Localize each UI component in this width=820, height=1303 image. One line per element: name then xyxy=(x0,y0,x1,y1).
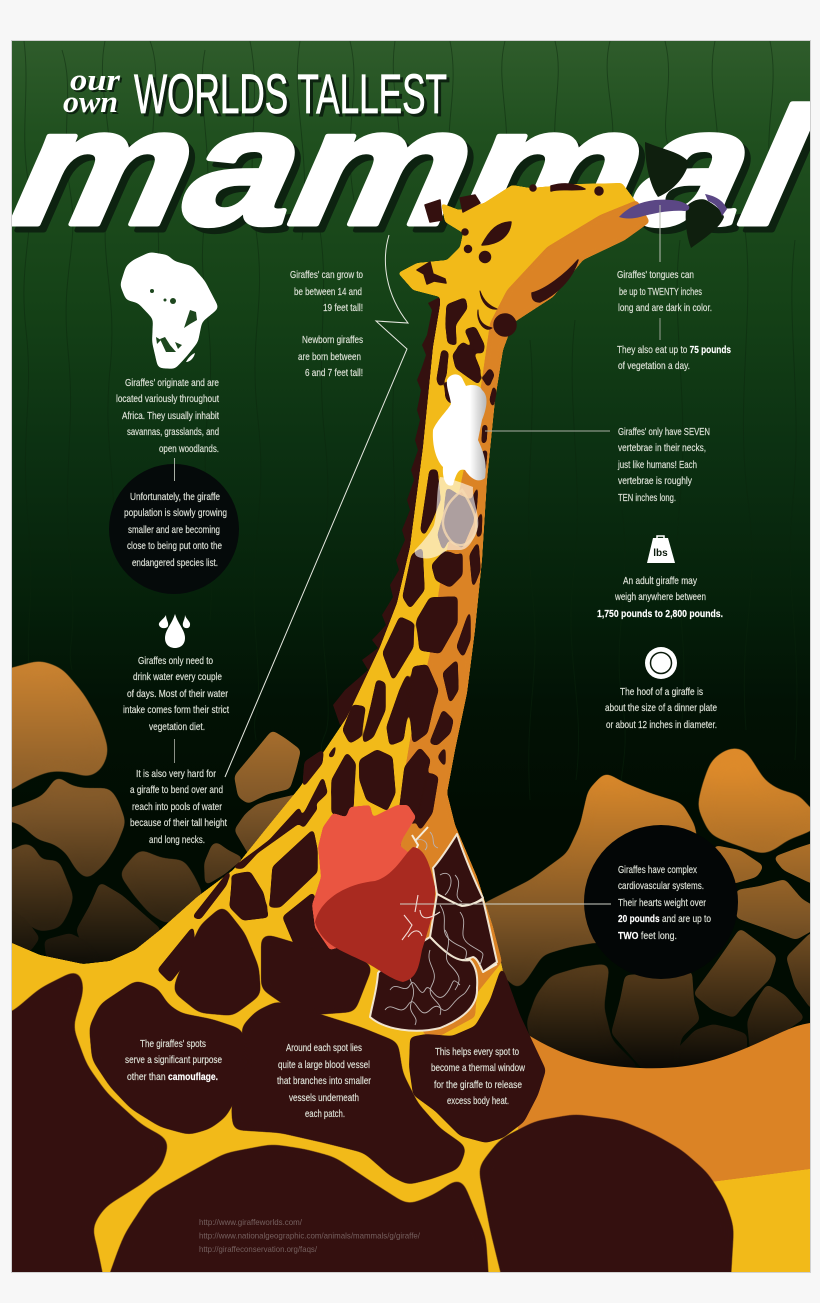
sources: http://giraffeconservation.org/faqs/ xyxy=(199,1244,318,1254)
lung lobes xyxy=(370,834,497,1031)
heart light top xyxy=(312,805,433,950)
circle: heart facts: TWO feet long. xyxy=(618,930,677,942)
text: tongue xyxy=(617,269,712,314)
text: height: Giraffes' can grow to xyxy=(290,269,363,281)
text: camouflage: other than camouflage. xyxy=(127,1071,218,1083)
title: our xyxy=(70,62,121,97)
vessels xyxy=(385,832,483,1025)
text: bending: reach into pools of water xyxy=(132,801,222,813)
text: origin: Africa. They usually inhabit xyxy=(122,410,219,422)
text: bending: and long necks. xyxy=(149,834,205,846)
circle: heart facts: Giraffes have complex xyxy=(618,864,698,876)
text: blood vessel xyxy=(277,1042,371,1120)
text: thermal window: for the giraffe to release xyxy=(434,1079,522,1091)
circle: endangered: Unfortunately, the giraffe xyxy=(130,491,220,503)
sources: http://www.giraffeworlds.com/ xyxy=(199,1217,303,1227)
text: blood vessel: Around each spot lies xyxy=(286,1042,362,1054)
tongue xyxy=(619,194,727,218)
icon: africa map xyxy=(120,252,219,369)
title: WORLDS TALLEST xyxy=(134,62,447,125)
leaves xyxy=(645,142,724,248)
title xyxy=(64,74,450,117)
text: hoof: or about 12 inches in diameter. xyxy=(606,719,717,731)
circle: endangered: endangered species list. xyxy=(132,557,218,569)
headline: mammal: mammal xyxy=(6,80,820,266)
text: thermal window: become a thermal window xyxy=(431,1062,525,1074)
giraffe orange shading xyxy=(400,200,650,1037)
circle: endangered xyxy=(109,464,239,594)
circle: endangered: population is slowly growing xyxy=(124,507,227,519)
icon: water drops xyxy=(159,614,190,648)
text: height: Newborn giraffes xyxy=(302,334,363,346)
text: origin: savannas, grasslands, and xyxy=(127,426,219,438)
text: vegetation: of vegetation a day. xyxy=(618,360,690,372)
text: water: of days. Most of their water xyxy=(127,688,228,700)
circle: endangered: close to being put onto the xyxy=(127,540,222,552)
height callout line xyxy=(225,235,408,777)
text: tongue: Giraffes' tongues can xyxy=(617,269,694,281)
text: hoof xyxy=(605,686,717,731)
text: hoof: about the size of a dinner plate xyxy=(605,702,717,714)
text: weight: An adult giraffe may xyxy=(623,575,698,587)
text: vertebrae: vertebrae in their necks, xyxy=(618,442,706,454)
circle: endangered: smaller and are becoming xyxy=(128,524,220,536)
text: vertebrae: just like humans! Each xyxy=(617,459,697,471)
text: vegetation xyxy=(617,344,731,372)
text: bending xyxy=(130,768,227,846)
text: camouflage: serve a significant purpose xyxy=(125,1054,222,1066)
title: WORLDS TALLEST xyxy=(137,65,450,128)
text: origin: located variously throughout xyxy=(116,393,219,405)
circle: heart facts: 20 pounds and are up to xyxy=(618,913,711,925)
text: height: 19 feet tall! xyxy=(323,302,363,314)
icon: weight xyxy=(647,536,675,563)
text: hoof: The hoof of a giraffe is xyxy=(620,686,703,698)
text: vertebrae: TEN inches long. xyxy=(618,492,676,504)
text: water: Giraffes only need to xyxy=(138,655,213,667)
circle: heart facts xyxy=(584,825,738,979)
heart dark lower xyxy=(315,847,435,982)
upper lung squiggle xyxy=(412,827,497,972)
circle: heart facts: Their hearts weight over xyxy=(618,897,706,909)
text: weight: weigh anywhere between xyxy=(614,591,706,603)
text: height xyxy=(290,269,363,379)
lower vertebrae translucent xyxy=(415,477,478,559)
sources: http://www.nationalgeographic.com/animals/mammals/g/giraffe/ xyxy=(199,1230,421,1240)
text: vertebrae: vertebrae is roughly xyxy=(618,475,693,487)
text: camouflage: The giraffes' spots xyxy=(140,1038,206,1050)
text: vertebrae: Giraffes' only have SEVEN xyxy=(618,426,710,438)
text: bending: because of their tall height xyxy=(130,817,227,829)
text: tongue: be up to TWENTY inches xyxy=(619,286,702,298)
icon: weight: lbs xyxy=(653,548,668,559)
text: water: drink water every couple xyxy=(133,671,222,683)
giraffe neck and body spots xyxy=(158,298,496,982)
text: height: are born between xyxy=(298,351,361,363)
background spots left xyxy=(0,660,302,968)
text: water xyxy=(123,655,229,733)
text: height: be between 14 and xyxy=(294,286,362,298)
giraffe large bottom spots xyxy=(0,905,734,1295)
text: blood vessel: each patch. xyxy=(305,1108,345,1120)
text: blood vessel: that branches into smaller xyxy=(277,1075,371,1087)
text: weight: 1,750 pounds to 2,800 pounds. xyxy=(597,608,723,620)
giraffe head spots xyxy=(417,184,603,336)
headline: mammal xyxy=(12,101,810,234)
text: height: 6 and 7 feet tall! xyxy=(305,367,363,379)
leaf lower xyxy=(686,199,724,248)
title: own xyxy=(63,84,118,119)
text: weight xyxy=(597,575,723,620)
heart veins xyxy=(402,895,440,940)
text: tongue: long and are dark in color. xyxy=(618,302,712,314)
lungs xyxy=(370,827,497,1031)
text: bending: a giraffe to bend over and xyxy=(130,784,223,796)
text: vertebrae xyxy=(617,426,710,504)
headline: mammal: mammal xyxy=(0,74,820,260)
leaf upper xyxy=(645,142,689,197)
text: origin: open woodlands. xyxy=(159,443,219,455)
title: our xyxy=(72,64,123,99)
text: blood vessel: quite a large blood vessel xyxy=(278,1059,370,1071)
text: bending: It is also very hard for xyxy=(136,768,216,780)
circle: heart facts: cardiovascular systems. xyxy=(618,880,704,892)
text: camouflage xyxy=(125,1038,222,1083)
heart xyxy=(312,805,440,982)
title: own xyxy=(65,86,120,121)
text: thermal window: This helps every spot to xyxy=(435,1046,519,1058)
text: water: vegetation diet. xyxy=(149,721,205,733)
sources xyxy=(199,1217,421,1254)
orange ground xyxy=(518,1023,810,1182)
vertebrae ring xyxy=(443,490,476,545)
vertebrae xyxy=(415,374,486,559)
text: blood vessel: vessels underneath xyxy=(289,1092,359,1104)
giraffe mane xyxy=(333,297,445,725)
text: origin: Giraffes' originate and are xyxy=(125,377,219,389)
text: water: intake comes form their strict xyxy=(123,704,229,716)
text: origin xyxy=(116,377,219,455)
text: thermal window xyxy=(431,1046,525,1107)
text: vegetation: They also eat up to 75 pounds xyxy=(617,344,731,356)
upper vertebrae xyxy=(433,374,486,486)
text: thermal window: excess body heat. xyxy=(447,1095,509,1107)
background spots right xyxy=(480,748,820,1072)
icon: dinner plate xyxy=(645,647,677,679)
